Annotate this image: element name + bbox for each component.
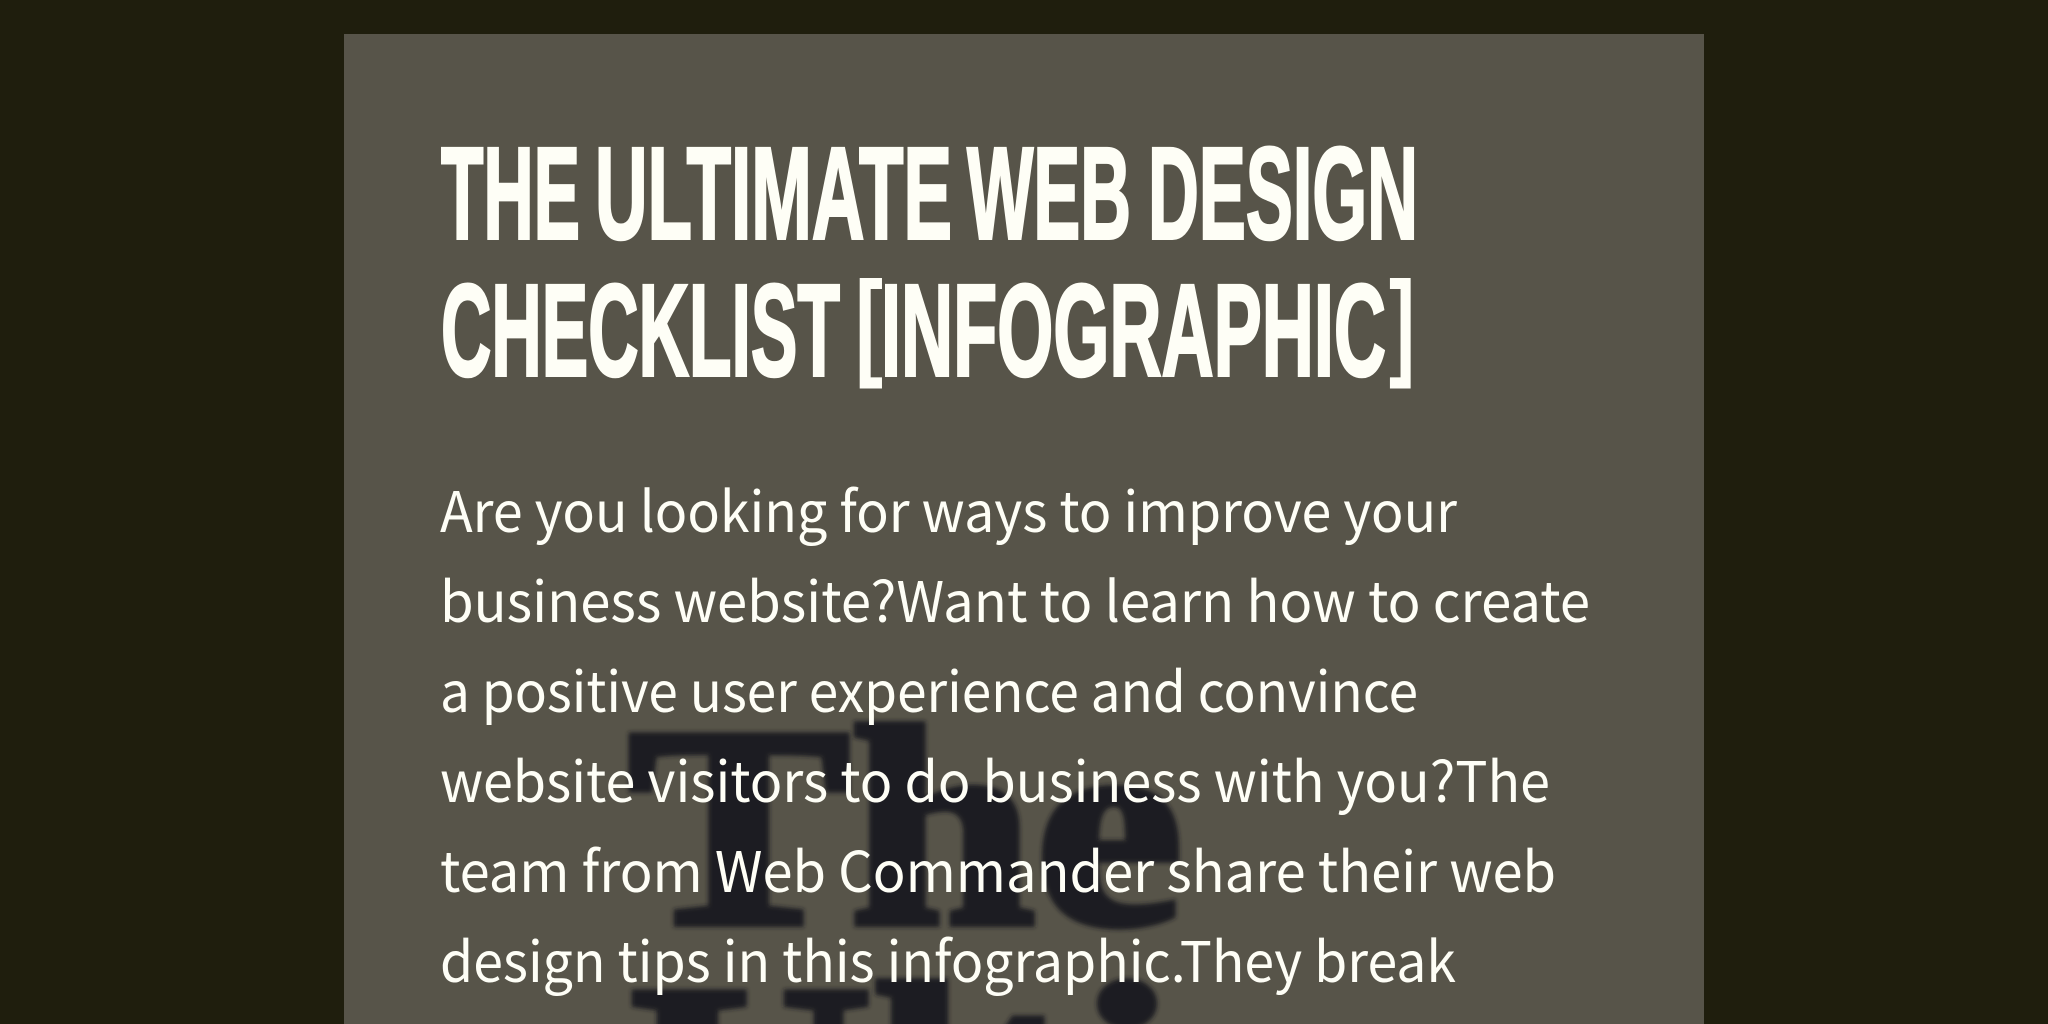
title: CHECKLIST <box>441 256 840 404</box>
title: ] <box>1389 257 1415 390</box>
title <box>441 120 1418 404</box>
title: DESIGN <box>1148 120 1418 266</box>
body paragraph <box>440 468 1590 999</box>
body paragraph: Are you looking for ways to improve your <box>440 468 1457 549</box>
title: INFOGRAPHIC <box>881 256 1386 404</box>
title: ULTIMATE <box>595 120 952 266</box>
body paragraph: a positive user experience and convince <box>440 648 1418 729</box>
title: WEB <box>967 120 1131 266</box>
body paragraph: design tips in this infographic.They break <box>440 918 1456 999</box>
title: [ <box>855 257 883 390</box>
body paragraph: business website?Want to learn how to create <box>440 558 1590 639</box>
body paragraph: team from Web Commander share their web <box>440 828 1556 909</box>
body paragraph: website visitors to do business with you?The <box>440 738 1550 819</box>
blurred background image text: The <box>628 669 1183 985</box>
panel: article card <box>344 34 1704 1024</box>
title: THE <box>441 120 580 266</box>
